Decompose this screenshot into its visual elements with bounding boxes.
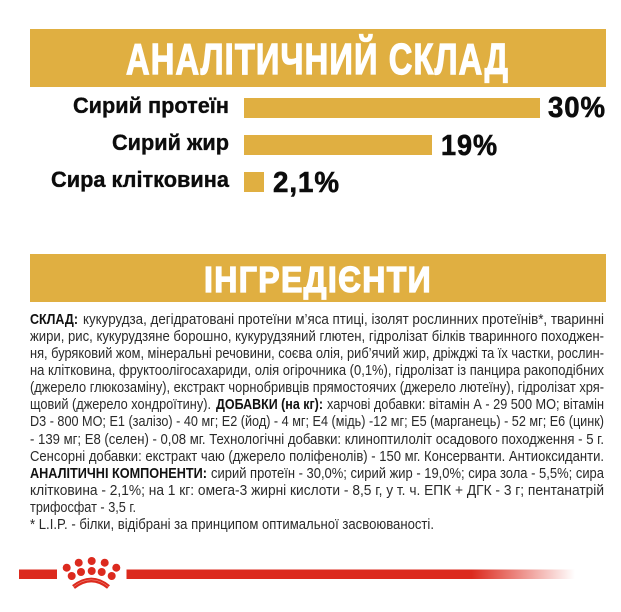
bar row: crude protein 30%: Сирий протеїн xyxy=(73,93,229,118)
text block: ingredient list: АНАЛІТИЧНІ КОМПОНЕНТИ: xyxy=(30,465,207,482)
bar row: crude fat 19% xyxy=(112,130,498,162)
bar row: crude fibre 2,1%: 2,1% xyxy=(273,167,340,199)
heading band: analytical composition xyxy=(30,29,606,87)
panel: ingredients xyxy=(30,254,606,533)
heading band: ingredients: ІНГРЕДІЄНТИ xyxy=(204,259,432,300)
bar row: crude fibre 2,1% xyxy=(51,167,340,199)
bar row: crude fat 19%: 19% xyxy=(441,130,498,162)
text block: ingredient list: СКЛАД: xyxy=(30,311,78,328)
icon: crown logo xyxy=(63,557,120,587)
bar row: crude protein 30%: 30% xyxy=(548,92,606,124)
text block: ingredient list: * L.I.P. - білки, відібрані за принципом оптимальної засвоюваності. xyxy=(30,516,434,533)
bar row: crude protein 30% xyxy=(73,92,606,124)
panel: analytical composition xyxy=(30,29,606,199)
bar row: crude fibre 2,1%: Сира клітковина xyxy=(51,167,230,192)
text block: ingredient list: ДОБАВКИ (на кг): xyxy=(216,396,323,413)
text block: ingredient list: трифосфат - 3,5 г. xyxy=(30,499,136,516)
bar row: crude fat 19%: Сирий жир xyxy=(112,130,229,155)
text block: ingredient list xyxy=(30,311,605,533)
text block: ingredient list: щовий (джерело хондроїтину). xyxy=(30,396,211,413)
heading band: ingredients xyxy=(30,254,606,302)
footer brand line with crown logo xyxy=(19,557,575,587)
